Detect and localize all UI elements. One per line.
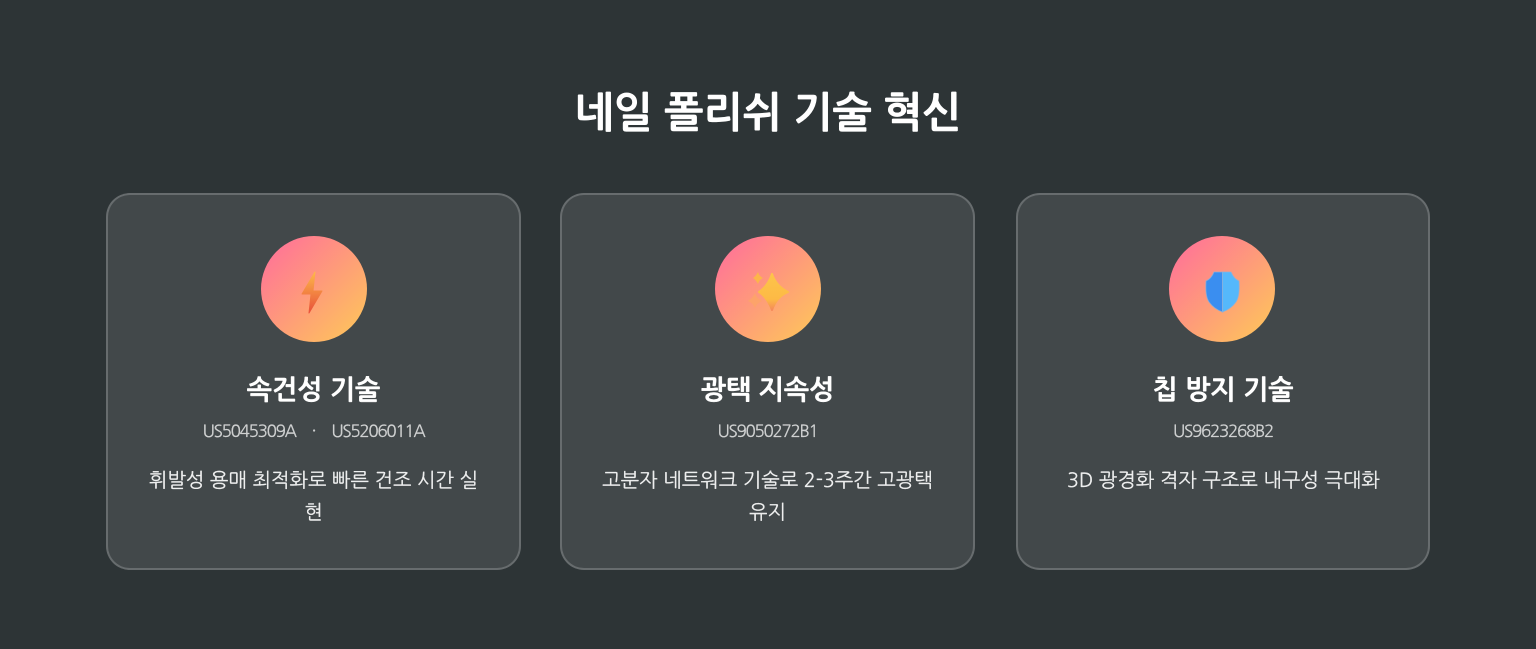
title: 네일 폴리쉬 기술 혁신 — [575, 93, 961, 134]
patent number: US9623268B2 — [1173, 423, 1273, 440]
heading: 속건성 기술 — [247, 376, 380, 403]
patent number: US9050272B1 — [717, 423, 818, 440]
description: 3D 광경화 격자 구조로 내구성 극대화 — [1067, 470, 1380, 490]
panel: quick-dry technology — [106, 193, 521, 570]
heading: 광택 지속성 — [701, 376, 834, 403]
patent numbers: US5045309A · US5206011A — [203, 423, 424, 440]
panel: chip prevention — [1016, 193, 1430, 570]
icon: lightning bolt — [261, 236, 367, 342]
icon: shield — [1169, 236, 1275, 342]
icon: sparkles — [715, 236, 821, 342]
description: 고분자 네트워크 기술로 2-3주간 고광택 유지 — [602, 470, 933, 522]
description: 휘발성 용매 최적화로 빠른 건조 시간 실현 — [149, 470, 478, 522]
panel: gloss durability — [560, 193, 975, 570]
heading: 칩 방지 기술 — [1153, 376, 1293, 403]
